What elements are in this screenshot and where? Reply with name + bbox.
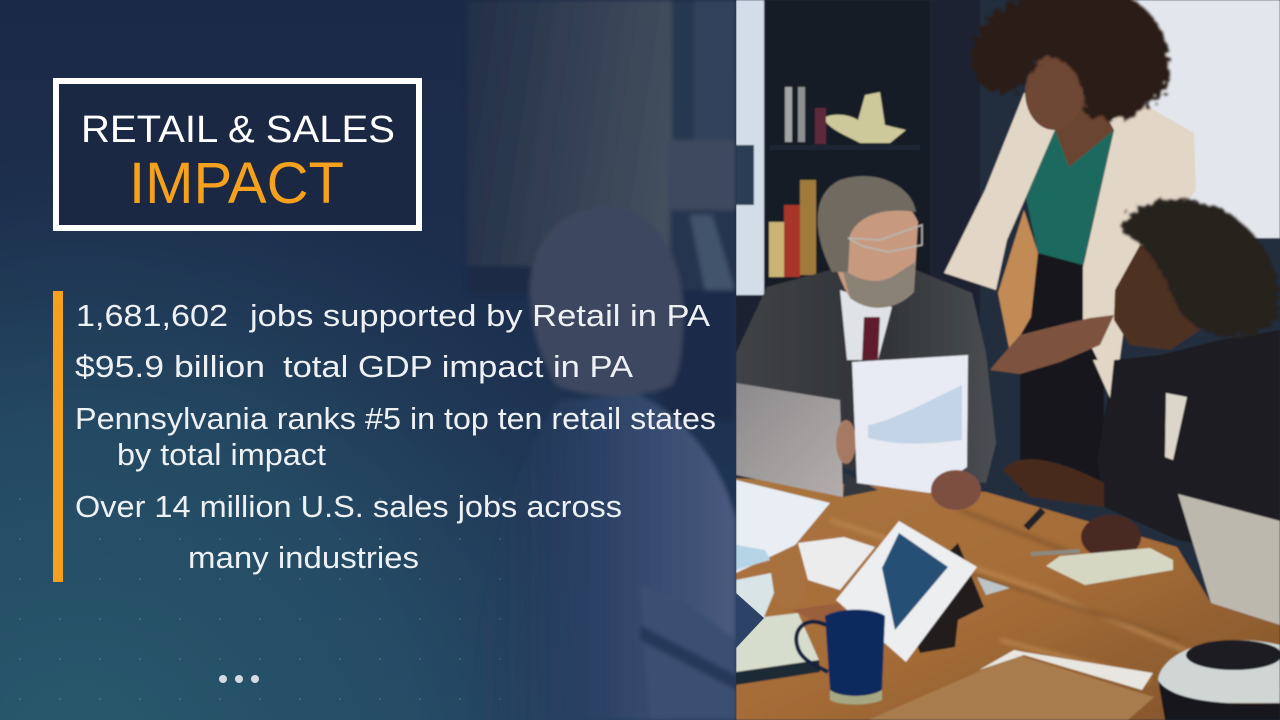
stat: state ranking: by total impact	[117, 437, 326, 472]
laptop, left	[736, 383, 878, 497]
stat: sales jobs	[75, 489, 622, 575]
title box	[56, 81, 419, 228]
seated woman	[1003, 199, 1280, 560]
ghosted background photo	[467, 0, 736, 720]
accent bar	[53, 291, 63, 582]
brown envelope	[868, 650, 1154, 720]
shelf objects	[769, 87, 906, 277]
stat: sales jobs: many industries	[188, 540, 419, 575]
laptop, right	[1178, 494, 1280, 625]
stat: state ranking: in top ten retail states	[410, 401, 716, 436]
stat: GDP impact: $95.9 billion	[75, 349, 265, 384]
stat: retail jobs: jobs supported by Retail in PA	[249, 298, 710, 333]
office background	[736, 0, 1280, 602]
conference speaker	[1158, 640, 1280, 720]
standing woman	[944, 0, 1196, 490]
title line 2: IMPACT	[129, 151, 344, 216]
notebook and pen	[1026, 510, 1173, 585]
woman's reaching hand	[990, 315, 1114, 374]
man's hand	[931, 470, 981, 510]
stat: state ranking: Pennsylvania ranks #5	[75, 401, 401, 436]
stat: sales jobs: Over 14 million U.S. sales jobs across	[75, 489, 622, 524]
photo: business team at table	[736, 0, 1280, 720]
arrow notch	[736, 593, 764, 648]
title line 1: RETAIL & SALES	[81, 109, 395, 151]
stat: GDP impact: total GDP impact in PA	[283, 349, 633, 384]
blue mug	[796, 610, 885, 704]
paper document	[852, 355, 968, 493]
tablet	[836, 521, 984, 662]
bullet text block	[75, 298, 716, 575]
pagination dots	[219, 675, 259, 683]
stat: state ranking	[75, 401, 716, 472]
panel: left navy background	[0, 0, 736, 720]
seated woman's curly hair	[1122, 199, 1278, 337]
wooden table	[736, 478, 1280, 720]
woman's curly hair	[972, 0, 1169, 120]
stat: GDP impact	[75, 349, 633, 384]
seated man	[736, 176, 996, 483]
sleeve and arm	[736, 572, 843, 646]
stat: retail jobs	[76, 298, 710, 333]
papers on table	[736, 480, 1010, 685]
stat: retail jobs: 1,681,602	[76, 298, 228, 333]
